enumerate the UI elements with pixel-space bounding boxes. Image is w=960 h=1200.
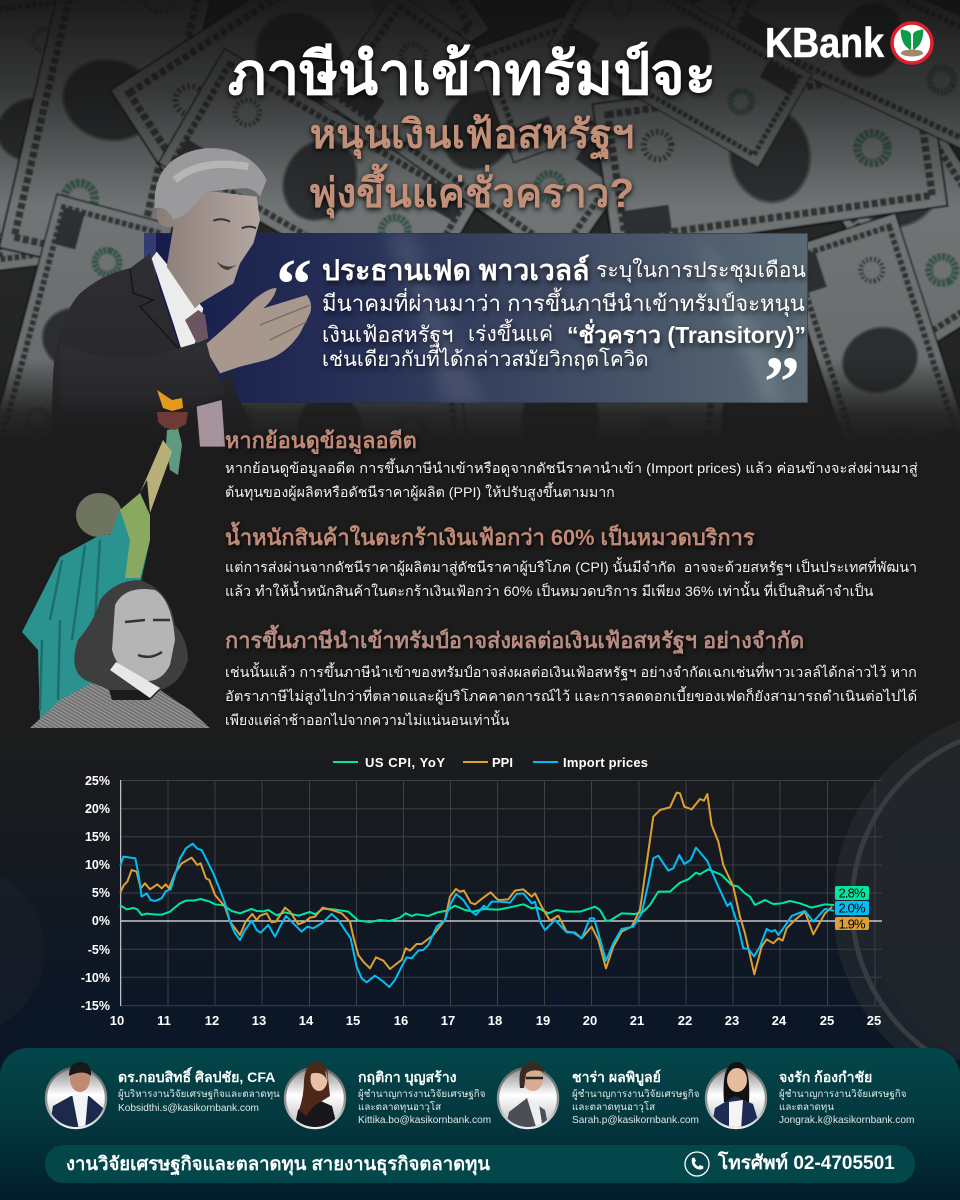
body: [225, 662, 917, 728]
name: จงรัก ก้องกำชัย: [779, 1069, 872, 1085]
body: แต่การส่งผ่านจากดัชนีราคาผู้ผลิตมาสู่ดัชนีราคาผู้บริโภค (CPI) นั้นมีจำกัด อาจจะด้วยสหรัฐฯ เป็นประเทศที่พัฒนา: [225, 559, 917, 575]
role: และตลาดทุนอาวุโส: [358, 1102, 441, 1113]
x axis labels: 20: [583, 1013, 597, 1028]
series: PPI: [121, 793, 832, 974]
y axis labels: 10%: [85, 858, 110, 872]
role: [779, 1089, 906, 1113]
x axis labels: 16: [394, 1013, 408, 1028]
y axis labels: 20%: [85, 802, 110, 816]
email: Sarah.p@kasikornbank.com: [572, 1115, 699, 1126]
body: หากย้อนดูข้อมูลอดีต การขึ้นภาษีนำเข้าหรือดูจากดัชนีราคานำเข้า (Import prices) แล้ว ค่อนข้างจะส่งผ่านมาสู่: [225, 460, 918, 476]
avatar: [44, 1062, 108, 1130]
contact: Kittika: [284, 1062, 491, 1130]
x axis labels: 25: [867, 1013, 881, 1028]
value tag: PPI 1.9%: 1.9%: [838, 916, 866, 932]
x axis labels: 10: [110, 1013, 124, 1028]
value tag: CPI 2.8%: 2.8%: [838, 886, 866, 900]
y axis labels: 15%: [85, 830, 110, 844]
y axis labels: -15%: [81, 999, 110, 1013]
quote line 1 bold: ประธานเฟด พาวเวลล์: [322, 254, 589, 286]
contact bar: [45, 1145, 915, 1183]
value tag: import 2.0%: 2.0%: [838, 900, 866, 916]
avatar: [704, 1062, 768, 1130]
line chart: CPI, PPI, import prices: [81, 755, 882, 1028]
section: limited impact: [225, 624, 917, 728]
quote line 2: มีนาคมที่ผ่านมาว่า การขึ้นภาษีนำเข้าทรัมป์จะหนุน: [322, 291, 805, 316]
subtitle line 2: พุ่งขึ้นแค่ชั่วคราว?: [310, 170, 634, 216]
chart legend: Import prices: [563, 755, 648, 770]
x axis labels: 24: [772, 1013, 787, 1028]
heading: หากย้อนดูข้อมูลอดีต: [225, 428, 417, 453]
y axis labels: [81, 774, 110, 1013]
coin: bottom right decoration: [833, 721, 960, 1060]
body: [225, 557, 917, 599]
subtitle line 1: หนุนเงินเฟ้อสหรัฐฯ: [310, 113, 634, 157]
x axis labels: 12: [205, 1013, 219, 1028]
role: และตลาดทุน: [779, 1102, 834, 1113]
x axis labels: 11: [157, 1013, 171, 1028]
contact: Sarah: [496, 1062, 699, 1130]
x axis labels: 18: [488, 1013, 502, 1028]
avatar: [496, 1062, 560, 1130]
name: ดร.กอบสิทธิ์ ศิลปชัย, CFA: [118, 1069, 275, 1085]
role: และตลาดทุนอาวุโส: [572, 1102, 655, 1113]
quote text: [276, 244, 808, 422]
footer panel: [0, 1048, 960, 1200]
logo: KBank: KBank: [765, 19, 885, 66]
x axis labels: 13: [252, 1013, 266, 1028]
section: past data: [224, 428, 918, 501]
x axis labels: 21: [630, 1013, 644, 1028]
x axis labels: 15: [346, 1013, 360, 1028]
icon: phone: [684, 1151, 710, 1177]
x axis labels: 17: [441, 1013, 455, 1028]
y axis labels: 0%: [92, 914, 110, 928]
name: กฤติกา บุญสร้าง: [358, 1069, 457, 1085]
opening quote mark: “: [276, 244, 312, 324]
email: Kobsidthi.s@kasikornbank.com: [118, 1103, 259, 1114]
body: เพียงแต่ล่าช้าออกไปจากความไม่แน่นอนเท่านั้น: [225, 712, 509, 728]
x axis labels: 23: [725, 1013, 739, 1028]
role: ผู้ชำนาญการงานวิจัยเศรษฐกิจ: [779, 1089, 906, 1100]
y axis labels: -10%: [81, 971, 110, 985]
y axis labels: 25%: [85, 774, 110, 788]
role: ผู้ชำนาญการงานวิจัยเศรษฐกิจ: [358, 1089, 485, 1100]
role: ผู้ชำนาญการงานวิจัยเศรษฐกิจ: [572, 1089, 699, 1100]
role: [358, 1089, 485, 1113]
quote line 1 regular: ระบุในการประชุมเดือน: [596, 259, 806, 282]
x axis labels: 14: [299, 1013, 314, 1028]
heading: การขึ้นภาษีนำเข้าทรัมป์อาจส่งผลต่อเงินเฟ้อสหรัฐฯ อย่างจำกัด: [225, 628, 804, 653]
contact: Jongrak: [704, 1062, 914, 1130]
contact: Kobsidthi: [44, 1062, 280, 1130]
y axis labels: 5%: [92, 886, 110, 900]
department name: งานวิจัยเศรษฐกิจและตลาดทุน สายงานธุรกิจตลาดทุน: [66, 1153, 490, 1174]
phone number: โทรศัพท์ 02-4705501: [718, 1153, 895, 1174]
heading: น้ำหนักสินค้าในตะกร้าเงินเฟ้อกว่า 60% เป็นหมวดบริการ: [225, 525, 755, 550]
body: [225, 458, 918, 501]
role: ผู้บริหารงานวิจัยเศรษฐกิจและตลาดทุน: [118, 1089, 280, 1100]
quote line 3 regular 2: เร่งขึ้นแค่: [468, 323, 553, 346]
series: import prices: [121, 844, 833, 987]
quote line 3 regular 1: เงินเฟ้อสหรัฐฯ: [322, 322, 453, 347]
y axis labels: -5%: [88, 943, 110, 957]
body: เช่นนั้นแล้ว การขึ้นภาษีนำเข้าของทรัมป์อาจส่งผลต่อเงินเฟ้อสหรัฐฯ อย่างจำกัดเฉกเช่นที่พาวเวลล์ได้กล่าวไว้ หาก: [225, 664, 917, 680]
background: banknotes collage: [0, 0, 960, 596]
email: Jongrak.k@kasikornbank.com: [779, 1115, 914, 1126]
section: basket weight: [225, 522, 917, 599]
x axis labels: 22: [678, 1013, 692, 1028]
chart legend: US CPI, YoY: [365, 755, 445, 770]
closing quote mark: ”: [764, 342, 800, 422]
quote panel: [144, 233, 808, 403]
x axis labels: 19: [536, 1013, 550, 1028]
body: อัตราภาษีไม่สูงไปกว่าที่ตลาดและผู้บริโภคคาดการณ์ไว้ และการลดดอกเบี้ยของเฟดก็ยังสามารถดำเนินต่อไปได้: [225, 688, 917, 704]
email: Kittika.bo@kasikornbank.com: [358, 1115, 491, 1126]
x axis labels: 25: [820, 1013, 834, 1028]
avatar: [284, 1062, 346, 1130]
quote line 3 bold: “ชั่วคราว (Transitory)”: [567, 322, 806, 348]
portrait: Fed chair Powell: [52, 148, 312, 447]
x axis labels: [110, 1013, 881, 1028]
quote line 4: เช่นเดียวกับที่ได้กล่าวสมัยวิกฤตโควิด: [322, 348, 649, 371]
chart legend: [333, 755, 648, 770]
series: US CPI: [121, 869, 833, 922]
illustration: Statue of Liberty: [22, 390, 188, 719]
chart legend: PPI: [492, 755, 513, 770]
name: ชาร่า ผลพิบูลย์: [572, 1069, 661, 1085]
body: แล้ว ทำให้น้ำหนักสินค้าในตะกร้าเงินเฟ้อกว่า 60% เป็นหมวดบริการ มีเพียง 36% เท่านั้น ที่เป็นสินค้าจำเป็น: [225, 583, 873, 599]
body: ต้นทุนของผู้ผลิตหรือดัชนีราคาผู้ผลิต (PPI) ให้ปรับสูงขึ้นตามมาก: [225, 484, 615, 500]
role: [572, 1089, 699, 1113]
title: ภาษีนำเข้าทรัมป์จะ: [228, 42, 716, 107]
illustration: Benjamin Franklin: [30, 580, 210, 728]
